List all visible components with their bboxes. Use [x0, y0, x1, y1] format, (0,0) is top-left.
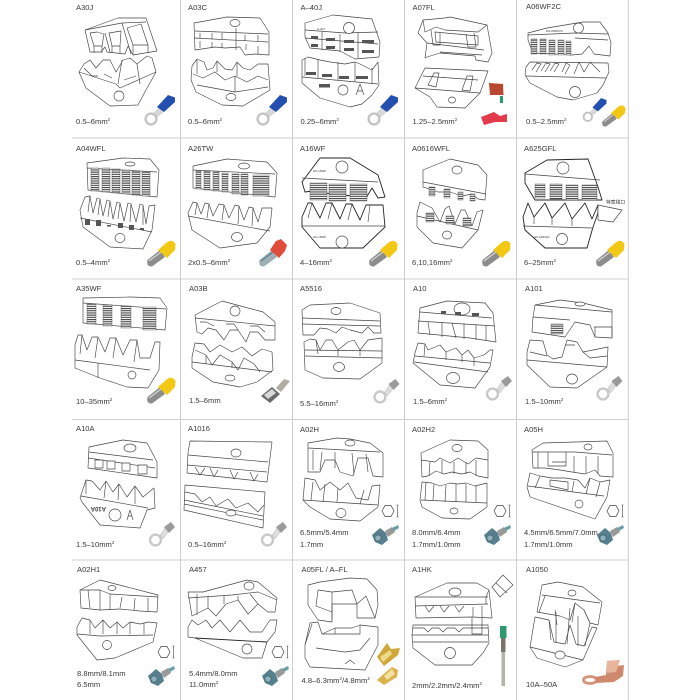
- title: A07FL: [412, 3, 435, 12]
- icon: blue ring terminal: [369, 95, 398, 124]
- wire size: 2: [224, 540, 227, 545]
- wire size: 1.7mm/1.0mm: [412, 540, 461, 549]
- wire size: 2x0.5–6mm: [188, 258, 228, 267]
- cell: A10A: [76, 424, 175, 549]
- icon: yellow ferrule: [147, 378, 176, 404]
- wire size: 2: [336, 117, 339, 122]
- icon: hex profile and BNC connector: [148, 646, 175, 686]
- wire size: 6,10,16mm: [412, 258, 450, 267]
- wire size: 8.0mm/6.4mm: [412, 528, 461, 537]
- title: A05FL / A–FL: [302, 565, 348, 574]
- wire size: 2: [367, 676, 370, 681]
- die drawing: [302, 15, 380, 107]
- wire size: 2: [220, 117, 223, 122]
- cell: A05H: [524, 425, 624, 549]
- wire size: 2mm/2.2mm/2.4mm: [412, 681, 480, 690]
- cell: A05FL / A-FL: [302, 565, 400, 685]
- wire size: 0.5–16mm: [188, 540, 224, 549]
- cell: A101: [525, 284, 622, 406]
- icon: hex profile and BNC connector: [372, 505, 399, 545]
- die drawing: [79, 18, 157, 106]
- die drawing: [191, 17, 270, 106]
- wire size: 10A–50A: [526, 680, 558, 689]
- title: A5516: [300, 284, 322, 293]
- die label: HS-16WF: [313, 235, 326, 239]
- cell: A1016: [184, 424, 287, 549]
- die drawing: [412, 575, 513, 665]
- title: A06WF2C: [526, 2, 562, 11]
- icon: red quick connector: [481, 112, 507, 125]
- die drawing: [80, 158, 159, 249]
- wire size: 5.4mm/8.0mm: [189, 669, 238, 678]
- icon: hex profile and BNC connector: [262, 646, 289, 686]
- wire size: 2: [330, 258, 333, 263]
- icon: spade terminal: [261, 379, 290, 403]
- title: A101: [525, 284, 543, 293]
- wire size: 1.5–10mm: [525, 397, 561, 406]
- cell: A457: [188, 565, 289, 689]
- wire size: 2: [450, 258, 453, 263]
- cell: A1HK: [412, 565, 513, 690]
- icon: red flag terminal: [489, 83, 504, 103]
- icon: gold flag terminal: [377, 667, 398, 685]
- icon: gold tab terminal: [377, 643, 400, 666]
- die drawing: [303, 438, 383, 521]
- cell: A35WF: [75, 284, 176, 406]
- icon: yellow ferrule: [596, 241, 624, 267]
- die label: HS-16WF: [313, 169, 326, 173]
- wire size: 4.8–6.3mm: [302, 676, 340, 685]
- title: A03C: [188, 3, 208, 12]
- wire size: 2: [228, 258, 231, 263]
- icon: blue ring terminal: [584, 98, 606, 121]
- title: A10A: [76, 424, 96, 433]
- cell: A26TW: [188, 144, 287, 267]
- cell: A03C: [188, 3, 287, 126]
- title: A0616WFL: [412, 144, 450, 153]
- title: A02H: [300, 425, 319, 434]
- die drawing: [302, 158, 385, 248]
- icon: bare ring terminal: [375, 379, 400, 402]
- wire size: 2: [340, 676, 342, 681]
- wire size: 11.0mm: [189, 680, 216, 689]
- title: A–40J: [300, 3, 322, 12]
- cell: A03B: [189, 284, 290, 405]
- die label: HS-625GFL: [534, 235, 550, 239]
- die label: HS-06WF2C: [546, 29, 564, 33]
- die drawing: [525, 22, 611, 100]
- wire size: 2: [455, 117, 458, 122]
- cell: A-40J: [300, 3, 398, 126]
- title: A1050: [526, 565, 548, 574]
- wire size: 2: [108, 258, 111, 263]
- icon: hex profile and BNC connector: [597, 505, 624, 545]
- icon: copper lug: [584, 660, 624, 684]
- icon: yellow ferrule: [369, 241, 398, 267]
- die drawing: [305, 578, 378, 670]
- die drawing: [527, 441, 613, 519]
- title: A16WF: [300, 144, 326, 153]
- die drawing: [77, 580, 158, 660]
- icon: bare ring terminal: [598, 376, 622, 399]
- cell: A1050: [526, 565, 624, 689]
- cell: A06WF2C: [525, 2, 625, 127]
- die drawing: A10A: [90, 505, 106, 511]
- title: A625GFL: [524, 144, 557, 153]
- die drawing: [530, 582, 602, 667]
- icon: yellow ferrule: [147, 241, 176, 267]
- die drawing: [415, 17, 492, 108]
- wire size: 2: [112, 540, 115, 545]
- cell: A16WF: [300, 144, 398, 267]
- icon: blue ring terminal: [146, 95, 175, 124]
- wire size: 10–35mm: [76, 397, 110, 406]
- wire size: 0.5–6mm: [76, 117, 108, 126]
- wire size: 1.5–6mm: [413, 397, 445, 406]
- title: A30J: [76, 3, 94, 12]
- icon: yellow ferrule: [482, 241, 510, 267]
- wire size: /4.8mm: [342, 676, 367, 685]
- cell: A02H2: [412, 425, 511, 549]
- wire size: 2: [554, 258, 557, 263]
- cell: A04WFL: [76, 144, 176, 267]
- cell: A0616WFL: [412, 144, 510, 267]
- cell: A5516: [300, 284, 400, 408]
- wire size: 8.8mm/8.1mm: [77, 669, 126, 678]
- title: A05H: [524, 425, 543, 434]
- wire size: 2: [480, 681, 483, 686]
- wire size: 1.7mm: [300, 540, 323, 549]
- icon: bare ring terminal: [150, 522, 175, 545]
- die drawing: [184, 441, 272, 528]
- die drawing: [417, 159, 487, 248]
- wire size: 2: [108, 117, 111, 122]
- die label: A-40J: [317, 27, 325, 31]
- wire size: 0.5–4mm: [76, 258, 108, 267]
- wire size: 0.5–6mm: [188, 117, 220, 126]
- wire size: 1.7mm/1.0mm: [524, 540, 573, 549]
- cell: A30J: [76, 3, 175, 126]
- die drawing: [188, 580, 277, 658]
- die drawing: [75, 297, 167, 388]
- wire size: 0.25–6mm: [300, 117, 336, 126]
- wire size: 2: [216, 680, 219, 685]
- title: A35WF: [76, 284, 102, 293]
- title: A04WFL: [76, 144, 106, 153]
- title: A1016: [188, 424, 210, 433]
- icon: blue ring terminal: [258, 95, 287, 124]
- wire size: 2: [110, 397, 113, 402]
- title: A26TW: [188, 144, 214, 153]
- icon: red twin ferrule: [259, 239, 287, 267]
- wire size: 1.5–6mm: [189, 396, 221, 405]
- wire size: 4.5mm/6.5mm/7.0mm: [524, 528, 598, 537]
- wire size: 2: [564, 117, 567, 122]
- icon: bare ring terminal: [487, 376, 512, 399]
- wire size: 2: [561, 397, 564, 402]
- icon: crimp contact pin: [500, 626, 506, 686]
- wire size: 5.5–16mm: [300, 399, 336, 408]
- icon: yellow ferrule: [602, 105, 625, 127]
- icon: hex profile and BNC connector: [484, 505, 511, 545]
- die drawing: [527, 300, 612, 388]
- wire size: 6–25mm: [524, 258, 554, 267]
- die drawing: [188, 159, 277, 248]
- cell: A07FL: [412, 3, 507, 126]
- wire size: 4–16mm: [300, 258, 330, 267]
- title: A10: [413, 284, 427, 293]
- cell: A02H1: [77, 565, 175, 689]
- cell: A02H: [300, 425, 399, 549]
- cell: A625GFL: [523, 144, 625, 267]
- die callout: 特宽钳口: [606, 198, 625, 206]
- die drawing: [192, 301, 275, 387]
- die drawing: [523, 159, 622, 248]
- wire size: 2: [445, 397, 448, 402]
- wire size: 2: [336, 399, 339, 404]
- cell: A10: [413, 284, 512, 406]
- title: A03B: [189, 284, 208, 293]
- wire size: 6.5mm/5.4mm: [300, 528, 349, 537]
- die drawing: [413, 301, 496, 388]
- wire size: 6.5mm: [77, 680, 100, 689]
- title: A02H1: [77, 565, 100, 574]
- wire size: 1.5–10mm: [76, 540, 112, 549]
- icon: bare ring terminal: [262, 522, 287, 545]
- wire size: 0.5–2.5mm: [526, 117, 564, 126]
- wire size: 1.25–2.5mm: [412, 117, 455, 126]
- grid lines: [72, 0, 628, 700]
- title: A02H2: [412, 425, 435, 434]
- title: A457: [189, 565, 207, 574]
- die drawing: [420, 440, 488, 519]
- die drawing: [302, 303, 382, 379]
- title: A1HK: [412, 565, 432, 574]
